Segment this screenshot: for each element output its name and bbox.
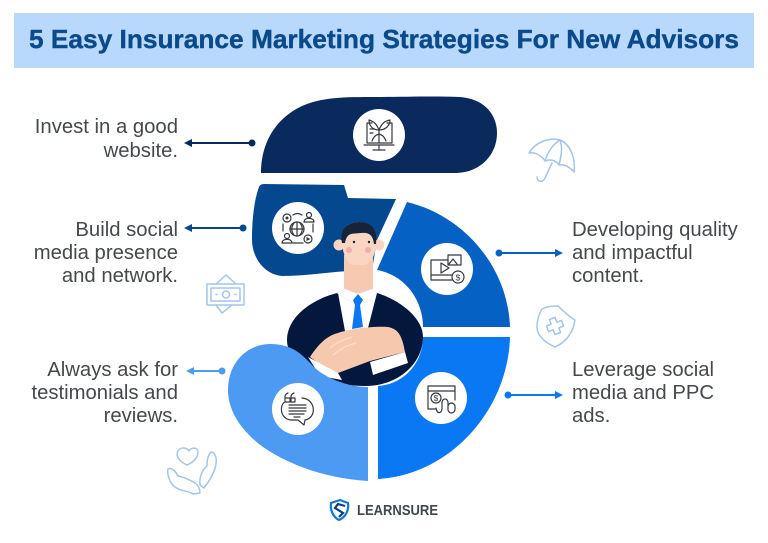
icon: video content: $ — [456, 272, 461, 282]
title banner: 5 Easy Insurance Marketing Strategies For New Advisors — [29, 24, 739, 54]
segment: paid ads — [378, 337, 510, 479]
arrow: ads — [504, 391, 563, 399]
label: Build social media: and network. — [62, 265, 178, 287]
label: Build social media: Build social — [75, 219, 178, 241]
label: Leverage social: ads. — [572, 405, 610, 427]
label: Invest in a good website: website. — [103, 140, 178, 162]
arrow: testimonials — [186, 367, 226, 375]
label: Always ask for testimonials — [31, 359, 178, 427]
label: Developing quality: content. — [572, 265, 644, 287]
title banner — [14, 13, 754, 68]
icon: website monitor with plant — [353, 109, 405, 161]
logo: Learnsure — [331, 500, 438, 520]
icon: money bill — [207, 275, 244, 313]
arrow: website — [184, 139, 256, 147]
label: Always ask for testimonials: testimonials and — [31, 382, 178, 404]
fingers — [330, 337, 356, 355]
icon: video content — [421, 243, 473, 295]
ears — [334, 240, 344, 250]
label: Developing quality: Developing quality — [572, 219, 739, 241]
suit — [287, 293, 423, 386]
label: Build social media: media presence — [34, 242, 178, 264]
head — [342, 222, 376, 265]
segment: content — [377, 202, 510, 327]
label: Invest in a good website: Invest in a good — [35, 116, 178, 138]
icon: PPC ads — [415, 372, 467, 424]
icon: shield with cross — [537, 306, 575, 347]
logo: Learnsure: LEARNSURE — [357, 503, 438, 519]
label: Leverage social: Leverage social — [572, 359, 714, 381]
icon: hands and heart — [168, 448, 216, 494]
label: Leverage social: media and PPC — [572, 382, 714, 404]
segment: testimonials — [228, 344, 368, 481]
cheeks — [346, 247, 352, 253]
icon: social network — [272, 202, 324, 254]
left cuff — [308, 357, 342, 380]
shirt — [338, 293, 377, 331]
arrow: content — [496, 249, 563, 257]
cuff — [370, 352, 408, 375]
arrow: social media — [184, 224, 246, 232]
label: Developing quality: and impactful — [572, 242, 693, 264]
tie — [352, 294, 363, 329]
label: Build social media — [34, 219, 178, 287]
neck — [344, 255, 373, 296]
icon: testimonial speech bubble — [272, 383, 324, 435]
segment: website (top of the 5) — [261, 97, 497, 173]
segment: social media — [252, 184, 396, 276]
eyes — [353, 241, 355, 243]
label: Always ask for testimonials: Always ask for — [47, 359, 178, 381]
hair — [341, 222, 376, 244]
icon: PPC ads: $ — [434, 394, 439, 403]
collar — [337, 289, 377, 303]
label: Leverage social — [572, 359, 714, 427]
label: Developing quality — [572, 219, 739, 287]
crossed arms — [310, 327, 405, 373]
label: Always ask for testimonials: reviews. — [104, 405, 178, 427]
label: Invest in a good website — [35, 116, 178, 162]
man illustration — [287, 222, 423, 386]
icon: umbrella — [529, 139, 574, 181]
